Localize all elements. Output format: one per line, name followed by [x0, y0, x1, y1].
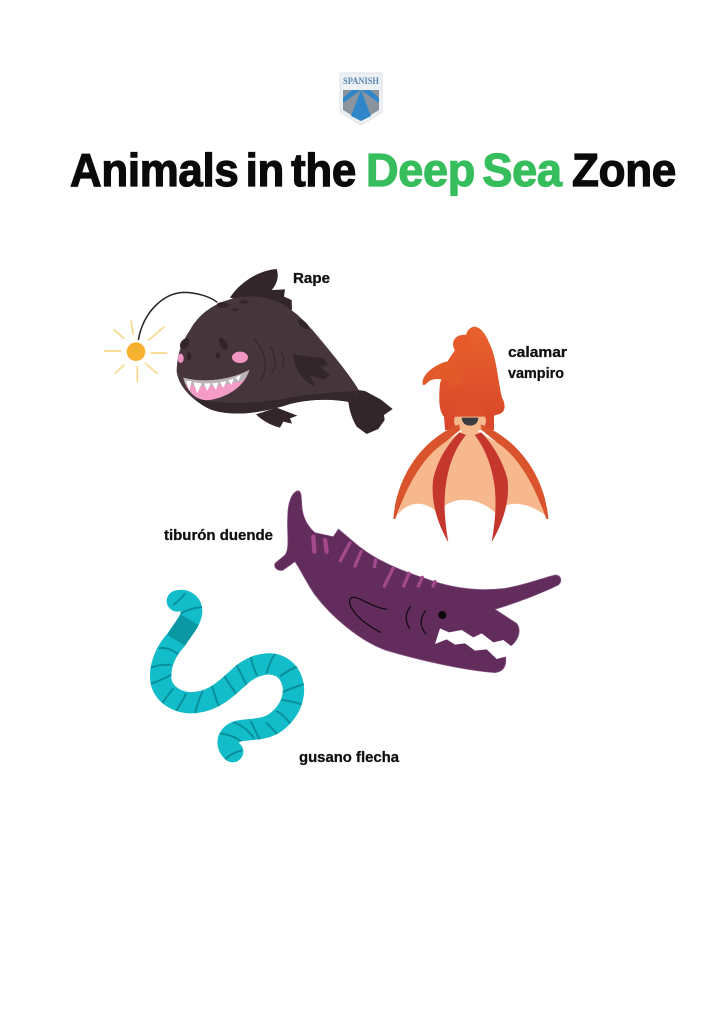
title: Animals in the [70, 144, 356, 196]
fin [423, 360, 463, 386]
gill lines [406, 607, 426, 634]
web between arms [397, 427, 545, 515]
body rings [149, 593, 305, 760]
mouth [183, 370, 249, 400]
title: Deep Sea [366, 145, 563, 196]
belly shade [194, 391, 358, 414]
lure light [105, 321, 167, 382]
eye ring [454, 409, 486, 433]
eye hood [455, 402, 486, 417]
mouth and teeth [435, 628, 513, 660]
fish lure line [138, 292, 217, 340]
pectoral fin line [350, 597, 387, 632]
cheeks [178, 352, 248, 363]
skin spots [178, 300, 310, 361]
pectoral fin [293, 354, 330, 387]
icon: academy logo shield [340, 73, 382, 125]
label: calamar vampiro [508, 344, 567, 382]
worm body [161, 601, 293, 752]
animal: anglerfish [105, 269, 393, 434]
dark band [177, 620, 190, 641]
title: Zone [572, 144, 676, 196]
outer right arm [481, 424, 548, 519]
inner left arm [433, 432, 466, 542]
label: calamar vampiro: calamar [508, 344, 567, 361]
outer left arm [393, 424, 460, 519]
label: tiburón duende: tiburón duende [164, 527, 273, 544]
inner right arm [475, 432, 508, 542]
body [177, 297, 359, 414]
belly fin [256, 408, 297, 428]
animal: vampire squid [393, 327, 548, 542]
head lobe [453, 335, 472, 354]
eye [462, 418, 478, 426]
title [70, 144, 676, 196]
body details [149, 593, 305, 760]
gill lines [253, 338, 284, 381]
shark body [275, 491, 561, 673]
label: Rape: Rape [293, 270, 330, 287]
label: calamar vampiro: vampiro [508, 365, 564, 382]
dorsal fin [230, 269, 292, 310]
label: gusano flecha: gusano flecha [299, 749, 400, 766]
animal: goblin shark [275, 491, 561, 673]
head mantle [439, 327, 505, 430]
icon: academy logo shield: SPANISH [343, 76, 379, 86]
animal: arrow worm [149, 593, 305, 760]
back stripes [313, 537, 435, 586]
eye [438, 611, 446, 619]
tail fin [348, 390, 393, 434]
